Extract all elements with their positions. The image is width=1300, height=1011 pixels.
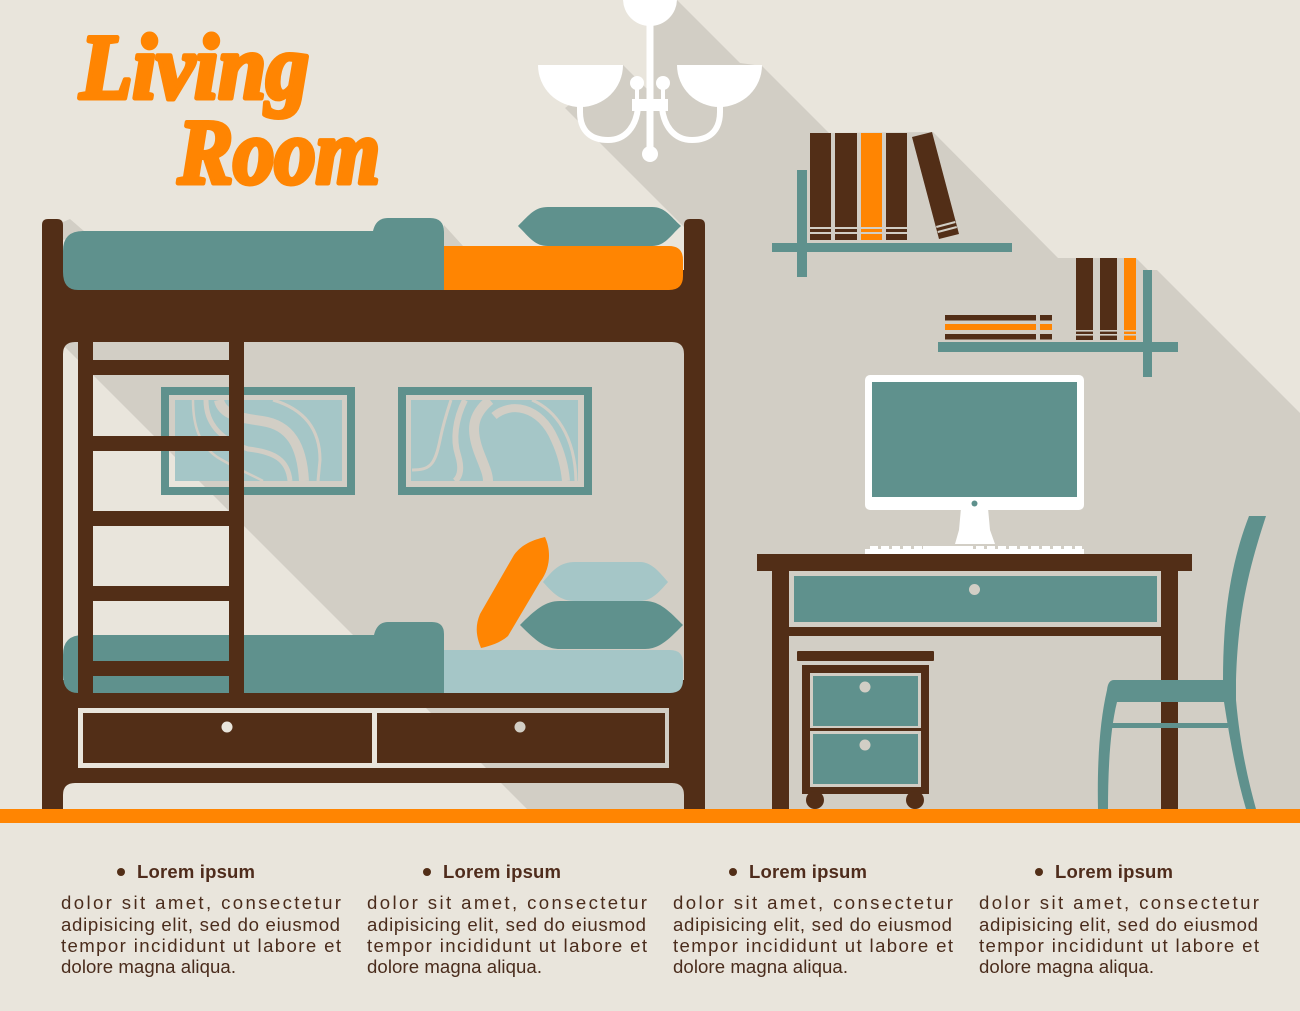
- bunk bed: [42, 207, 705, 809]
- upper mattress: [63, 218, 684, 292]
- picture: left wall painting: [161, 387, 355, 495]
- upper pillow: [518, 207, 681, 246]
- text column 3: adipisicing elit, sed do eiusmod: [673, 914, 952, 935]
- floor stripe: [0, 809, 1300, 823]
- title: [79, 16, 380, 203]
- text column 4: Lorem ipsum: [1055, 861, 1173, 882]
- desk: [757, 554, 1192, 809]
- lower pillows: [477, 537, 683, 649]
- title: Room: [177, 101, 380, 203]
- drawer cabinet: [797, 651, 934, 809]
- text column 4: tempor incididunt ut labore et: [979, 935, 1260, 956]
- text column 4: adipisicing elit, sed do eiusmod: [979, 914, 1258, 935]
- computer monitor: [865, 375, 1084, 544]
- text column 2: tempor incididunt ut labore et: [367, 935, 648, 956]
- icon: ceiling lamp: [538, 0, 762, 162]
- text column 2: dolor sit amet, consectetur: [367, 892, 647, 913]
- ladder: [78, 342, 244, 694]
- text column 2: Lorem ipsum: [443, 861, 561, 882]
- text column 4: dolore magna aliqua.: [979, 956, 1154, 977]
- keyboard: [865, 546, 1084, 554]
- bed frame: [42, 219, 705, 809]
- text column 2: [367, 861, 648, 977]
- text column 3: dolor sit amet, consectetur: [673, 892, 953, 913]
- text column 3: Lorem ipsum: [749, 861, 867, 882]
- text column 2: adipisicing elit, sed do eiusmod: [367, 914, 646, 935]
- text column 4: [979, 861, 1260, 977]
- under-bed drawers: [83, 713, 665, 763]
- text column 1: dolore magna aliqua.: [61, 956, 236, 977]
- text column 1: Lorem ipsum: [137, 861, 255, 882]
- lower mattress: [63, 622, 684, 695]
- lower shelf with books: [938, 258, 1178, 377]
- chair: [1098, 516, 1266, 809]
- text column 3: tempor incididunt ut labore et: [673, 935, 954, 956]
- text column 1: tempor incididunt ut labore et: [61, 935, 342, 956]
- long wall shadow: [63, 0, 1300, 810]
- upper shelf with books: [772, 132, 1012, 277]
- text column 4: dolor sit amet, consectetur: [979, 892, 1259, 913]
- text column 2: dolore magna aliqua.: [367, 956, 542, 977]
- text column 1: adipisicing elit, sed do eiusmod: [61, 914, 340, 935]
- text column 3: dolore magna aliqua.: [673, 956, 848, 977]
- text column 3: [673, 861, 954, 977]
- title: Living: [79, 16, 309, 118]
- picture: right wall painting: [398, 387, 592, 495]
- text column 1: [61, 861, 342, 977]
- text column 1: dolor sit amet, consectetur: [61, 892, 341, 913]
